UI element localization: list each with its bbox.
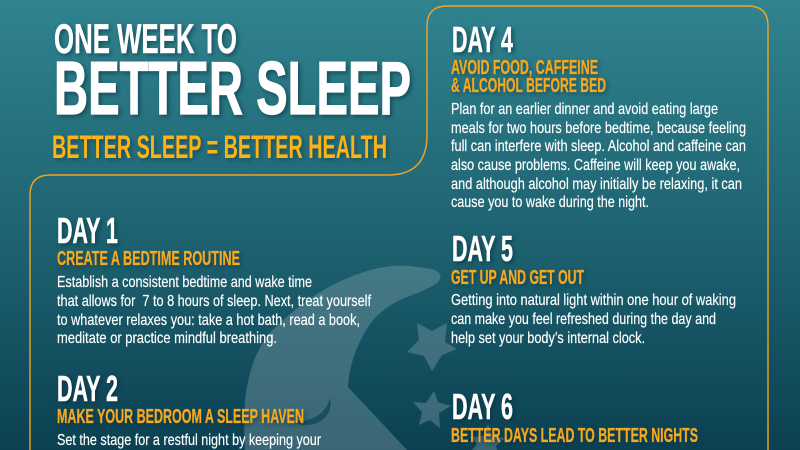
day 1 label: DAY 1 (57, 210, 118, 251)
day 4 body (451, 101, 746, 211)
day 6 label: DAY 6 (452, 386, 513, 427)
day 2 body: Set the stage for a restful night by keeping your (57, 432, 322, 449)
day 1 body: Establish a consistent bedtime and wake time (57, 274, 312, 291)
day 4 body: cause you to wake during the night. (451, 194, 649, 211)
day 4 label: DAY 4 (452, 19, 513, 60)
day 5 body: help set your body’s internal clock. (451, 330, 645, 347)
section: day 5 (451, 228, 736, 347)
day 5 label: DAY 5 (452, 228, 513, 269)
day 1 body (57, 274, 371, 347)
panel outline: days 1 to 3 (30, 26, 427, 450)
day 5 body (451, 292, 736, 347)
section: day 2 (57, 368, 322, 449)
section: day 1 (57, 210, 371, 347)
icon: crescent moon (244, 266, 441, 450)
section: day 4 (451, 19, 746, 211)
title (54, 15, 411, 130)
icon: large star (407, 323, 457, 371)
day 5 heading: GET UP AND GET OUT (451, 267, 584, 289)
moon illustration (244, 266, 505, 450)
day 4 heading: AVOID FOOD, CAFFEINE (451, 57, 598, 79)
day 1 body: to whatever relaxes you: take a hot bath, read a book, (57, 312, 360, 329)
day 4 body: Plan for an earlier dinner and avoid eating large (451, 101, 718, 118)
day 2 label: DAY 2 (57, 368, 118, 409)
day 4 heading: & ALCOHOL BEFORE BED (451, 75, 606, 97)
title line one: ONE WEEK TO (54, 15, 237, 62)
icon: closed moon eye (292, 398, 331, 425)
tagline: BETTER SLEEP = BETTER HEALTH (52, 129, 387, 165)
day 5 body: can make you feel refreshed during the day and (451, 311, 716, 328)
day 1 heading: CREATE A BEDTIME ROUTINE (57, 248, 240, 270)
title line two: BETTER SLEEP (54, 46, 411, 130)
section: day 6 (451, 386, 698, 447)
day 1 body: that allows for 7 to 8 hours of sleep. Next, treat yourself (57, 293, 371, 310)
day 1 body: meditate or practice mindful breathing. (57, 330, 277, 347)
day 4 heading (451, 57, 606, 97)
panel outline: days 4 to 7 (427, 6, 768, 450)
day 5 body: Getting into natural light within one hour of waking (451, 292, 736, 309)
day 2 heading: MAKE YOUR BEDROOM A SLEEP HAVEN (57, 406, 304, 428)
icon: middle star (413, 391, 451, 428)
icon: bottom star (470, 424, 505, 450)
